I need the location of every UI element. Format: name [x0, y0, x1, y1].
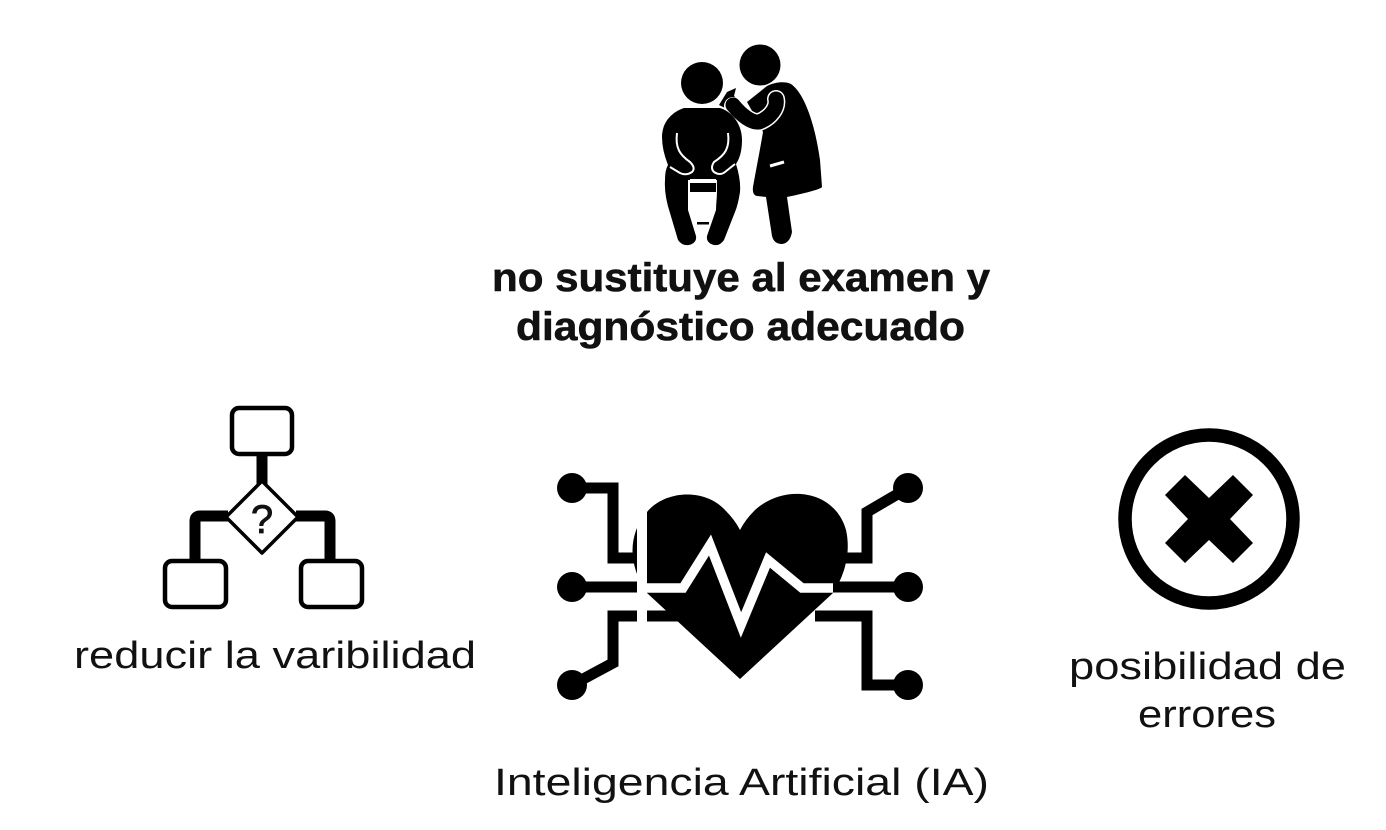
icon: decision flowchart [165, 408, 362, 607]
heart [647, 494, 848, 679]
pulse line [642, 545, 838, 625]
label: Inteligencia Artificial: Inteligencia Artificial (IA) [494, 762, 989, 804]
label: posibilidad de errores [1069, 646, 1346, 736]
patient figure [662, 62, 742, 245]
icon: error cross in circle [1125, 435, 1293, 603]
label: posibilidad de errores: errores [1138, 694, 1276, 736]
doctor arm and tool [719, 88, 738, 108]
heading: no sustituye: no sustituye al examen y [492, 256, 991, 300]
label: reducir la varibilidad: reducir la varibilidad [74, 635, 476, 677]
icon: AI heart circuit [557, 473, 923, 700]
icon: patient and doctor [662, 44, 822, 245]
heading: no sustituye: diagnóstico adecuado [516, 305, 965, 349]
doctor figure [719, 44, 822, 244]
heading: no sustituye [492, 256, 991, 349]
icon: decision flowchart: ? [251, 498, 273, 542]
circuit traces [572, 488, 908, 685]
label: posibilidad de errores: posibilidad de [1069, 646, 1346, 688]
